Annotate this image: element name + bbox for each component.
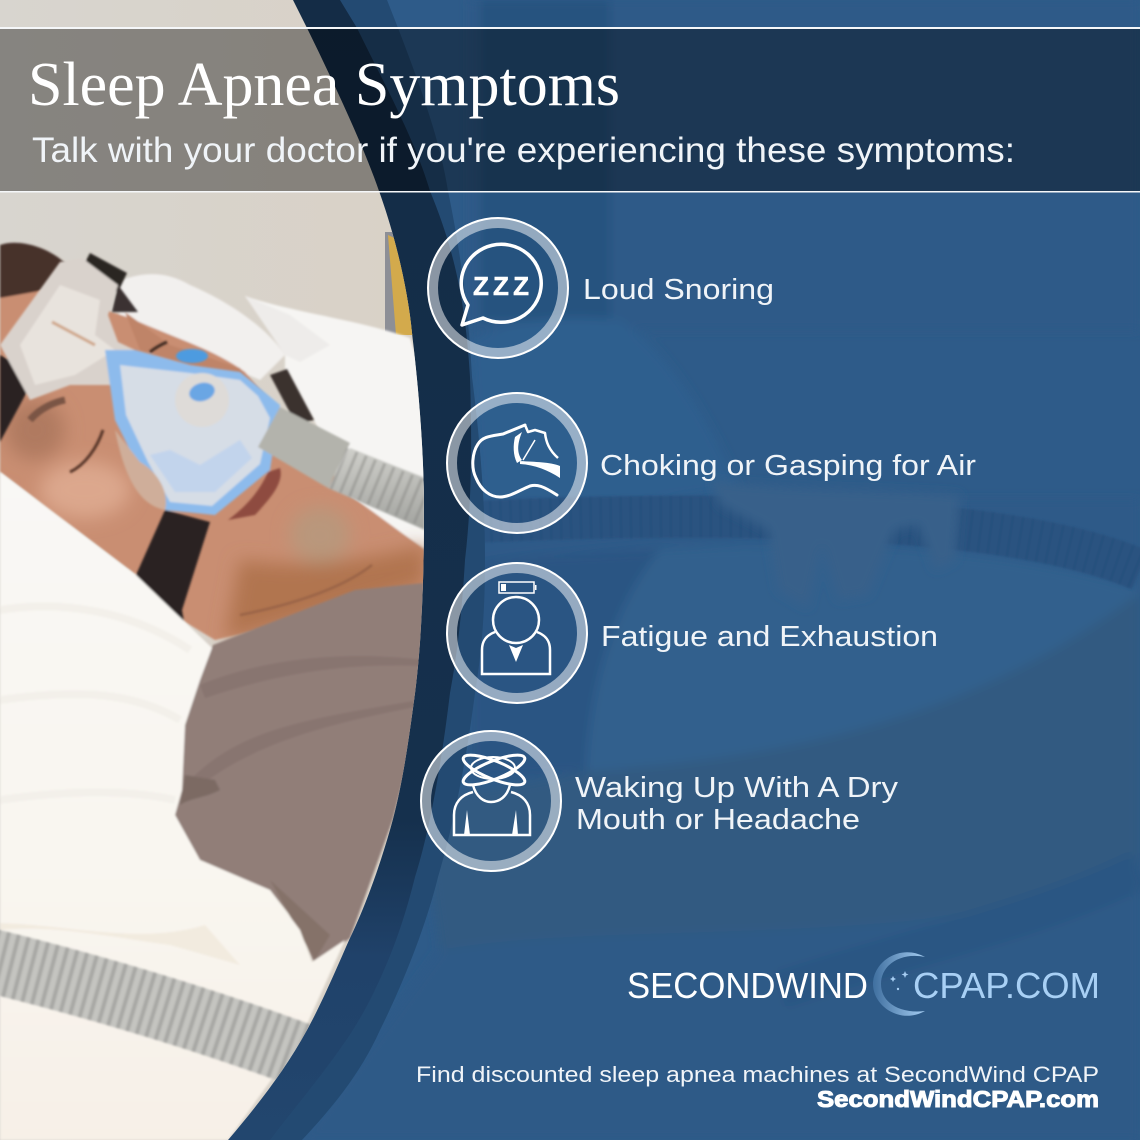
foreground pillow xyxy=(0,472,345,1140)
footer text: SecondWindCPAP.com xyxy=(817,1086,1099,1112)
logo: SecondWind CPAP.com: CPAP.COM xyxy=(913,965,1100,1006)
icon: speech bubble with ZZZ: ZZZ xyxy=(473,271,529,301)
label: dry mouth or headache xyxy=(575,772,899,836)
icon: head tilted back gasping xyxy=(447,393,587,533)
curved dark navy band xyxy=(0,0,471,1140)
label: dry mouth or headache: Mouth or Headache xyxy=(576,804,860,836)
icon: crescent moon with stars xyxy=(873,952,925,1016)
shirt xyxy=(175,583,424,965)
logo: SecondWind CPAP.com xyxy=(627,952,1100,1016)
footer text xyxy=(416,1062,1099,1112)
label: fatigue: Fatigue and Exhaustion xyxy=(601,621,938,653)
symptom: choking or gasping xyxy=(447,393,976,533)
label: dry mouth or headache: Waking Up With A Dry xyxy=(575,772,899,804)
symptom: dry mouth or headache xyxy=(421,731,899,871)
label: choking or gasping: Choking or Gasping for Air xyxy=(600,450,976,482)
logo: SecondWind CPAP.com: SECONDWIND xyxy=(627,965,868,1006)
header band xyxy=(0,27,1140,192)
icon: person with low battery xyxy=(447,563,587,703)
symptom: fatigue xyxy=(447,563,938,703)
clear frame xyxy=(0,258,135,400)
curved medium-blue band xyxy=(0,0,485,1140)
subtitle: Talk with your doctor if you're experiencing these symptoms: xyxy=(32,131,1015,170)
lower hose xyxy=(0,958,330,1066)
icon: speech bubble with ZZZ xyxy=(428,218,568,358)
photo: sleeping man wearing CPAP mask xyxy=(0,0,440,1140)
mask shell xyxy=(105,350,280,515)
title: Sleep Apnea Symptoms xyxy=(28,51,620,119)
symptom: loud snoring xyxy=(428,218,774,358)
icon: person with dizzy rings xyxy=(421,731,561,871)
label: loud snoring: Loud Snoring xyxy=(583,274,774,306)
footer text: Find discounted sleep apnea machines at SecondWind CPAP xyxy=(416,1062,1099,1087)
straps are part of the photo xyxy=(80,253,127,292)
